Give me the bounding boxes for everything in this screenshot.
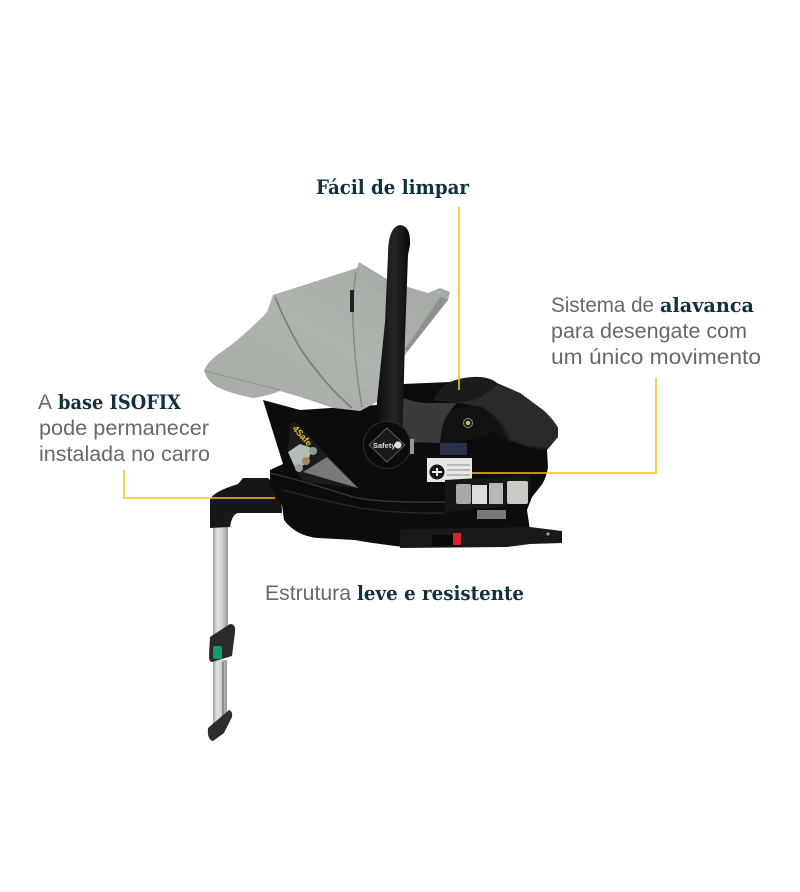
text block: sistema de alavanca: um único movimento	[551, 346, 761, 369]
airplane warning label	[427, 458, 472, 482]
text block: base ISOFIX: pode permanecer	[39, 417, 209, 440]
text block: estrutura leve e resistente: leve e resistente	[357, 582, 524, 605]
text block: base ISOFIX	[38, 391, 210, 466]
small navy label	[440, 443, 467, 455]
barcode tag	[477, 510, 506, 519]
callout line: base ISOFIX	[124, 470, 275, 498]
text block: sistema de alavanca: Sistema de	[551, 294, 654, 317]
text block: base ISOFIX: base ISOFIX	[58, 391, 182, 414]
seat padding	[403, 377, 558, 450]
4Safe side label	[288, 422, 358, 488]
4Safe side label: 4Safe	[291, 424, 314, 448]
text block: estrutura leve e resistente	[265, 582, 524, 605]
product photo: infant car seat on ISOFIX base	[204, 225, 562, 741]
base arm	[210, 478, 282, 528]
seat shell and base body	[263, 382, 548, 547]
callout line: fácil de limpar	[458, 207, 460, 390]
text block: sistema de alavanca	[551, 294, 761, 369]
instruction sticker	[445, 475, 530, 512]
heading: Fácil de limpar: Fácil de limpar	[316, 176, 470, 199]
text block: sistema de alavanca: alavanca	[660, 294, 754, 317]
callout line: alavanca	[472, 378, 656, 473]
text block: base ISOFIX: A	[38, 391, 52, 414]
text block: base ISOFIX: instalada no carro	[39, 443, 210, 466]
carry handle	[375, 225, 410, 432]
canopy	[204, 262, 450, 411]
ISOFIX connector	[400, 527, 562, 548]
Safety 1st hub	[364, 422, 414, 468]
text block: estrutura leve e resistente: Estrutura	[265, 582, 351, 605]
Safety 1st hub: Safety	[373, 441, 396, 450]
support leg	[208, 526, 235, 741]
text block: sistema de alavanca: para desengate com	[551, 320, 747, 343]
